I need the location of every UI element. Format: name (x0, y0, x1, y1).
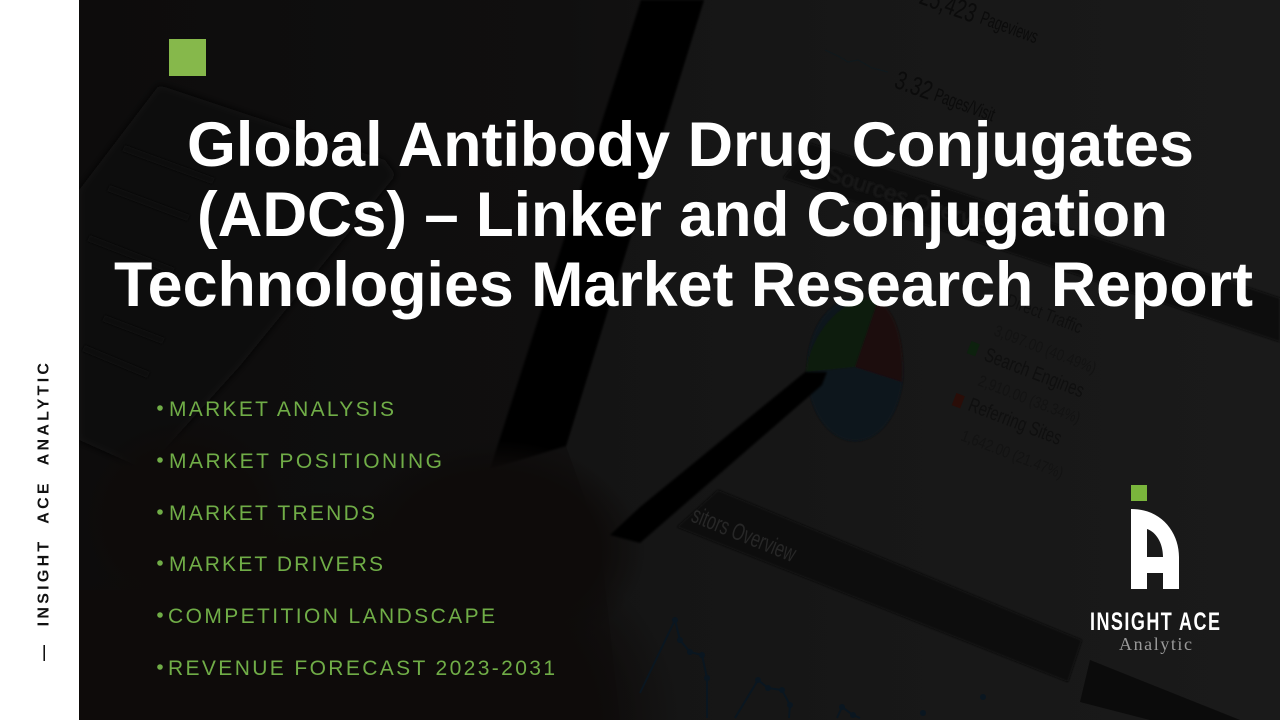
photo: visitors overview band (677, 490, 1082, 682)
photo: pie legend: Referring Sites (965, 394, 1065, 450)
photo: pageviews metric (891, 0, 1041, 126)
title: Global Antibody Drug Conjugates (187, 110, 1194, 180)
photo: pie legend: Direct Traffic (1004, 290, 1085, 337)
photo: pie legend: 1,642.00 (21.47%) (959, 428, 1065, 482)
title: Technologies Market Research Report (114, 250, 1253, 320)
photo: phone screen text lines (82, 145, 215, 378)
bullet: market analysis: MARKET ANALYSIS (169, 398, 394, 421)
photo: phone on the left (79, 85, 396, 470)
bullet: revenue forecast: REVENUE FORECAST 2023-2031 (168, 657, 555, 680)
photo: pie legend: 3,097.00 (40.49%) (992, 323, 1098, 377)
photo: line chart (640, 617, 986, 718)
photo: pageviews metric: 3.32 (891, 64, 937, 106)
left white sidebar (0, 0, 79, 720)
photo: pie legend: Search Engines (981, 344, 1087, 402)
photo: pen (610, 372, 827, 543)
bullet list (157, 398, 555, 680)
bullet: market trends: MARKET TRENDS (169, 502, 375, 525)
photo: report page light area (566, 0, 1280, 720)
logo wordmark: INSIGHT ACE (1090, 607, 1220, 636)
logo subtitle: Analytic (1119, 634, 1192, 654)
bullet: competition landscape: COMPETITION LANDSCAPE (168, 605, 495, 628)
photo: sparkline (825, 50, 888, 72)
photo: pie chart (806, 298, 903, 441)
photo: visitors overview label: sitors Overview (688, 502, 800, 568)
photo: pageviews metric: Pageviews (977, 8, 1041, 48)
logo icon: letter A (1131, 509, 1179, 589)
photo: lower right tab (1080, 660, 1240, 720)
bullet: market positioning: MARKET POSITIONING (169, 450, 442, 473)
sidebar vertical brand text: — INSIGHT ACE ANALYTIC (36, 363, 52, 661)
title: (ADCs) – Linker and Conjugation (197, 180, 1168, 250)
photo: hand holding the pen (79, 420, 680, 720)
photo: sources overview label: Sources Overview (823, 160, 1009, 243)
title (114, 110, 1253, 320)
bullet: market drivers: MARKET DRIVERS (169, 553, 383, 576)
photo: pie legend: 2,910.00 (38.34%) (976, 373, 1082, 427)
logo: Insight Ace Analytic (1090, 485, 1220, 654)
photo: pie legend (952, 290, 1098, 482)
photo: dark tablet edge band (490, 0, 704, 469)
green accent square (169, 39, 206, 76)
photo: pageviews metric: Pages/Visit (931, 85, 998, 126)
logo icon: green square (1131, 485, 1147, 501)
photo: sources overview band (783, 143, 1280, 342)
